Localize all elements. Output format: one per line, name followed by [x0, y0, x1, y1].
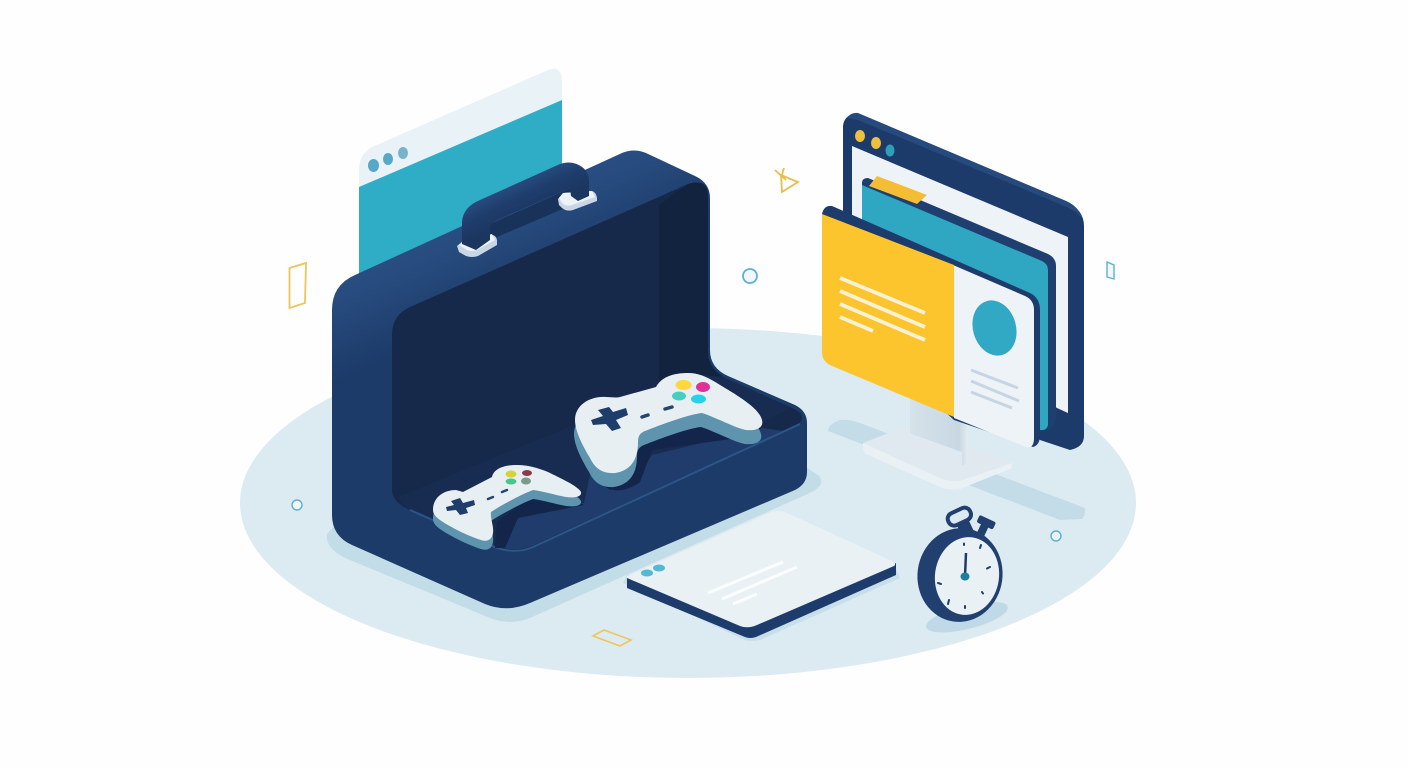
handle [457, 163, 597, 257]
stopwatch loop [946, 506, 978, 538]
stand base [863, 425, 1012, 490]
large game controller [574, 373, 762, 490]
handle foot left [457, 235, 497, 257]
decorative outlines [290, 168, 1114, 646]
inner wall right shade [659, 182, 722, 392]
monitor frame [843, 113, 1084, 450]
briefcase outer shell [332, 150, 807, 608]
handle recess [488, 188, 596, 240]
card white panel [953, 265, 1034, 447]
yellow rectangle left [290, 263, 306, 308]
small game controller [433, 465, 584, 550]
ground ellipse [240, 328, 1136, 678]
small controller shadow [495, 497, 584, 548]
controller shadow [592, 426, 752, 490]
stopwatch case [911, 523, 1009, 627]
controller select and start [642, 407, 672, 417]
stopwatch face [930, 533, 1004, 619]
stopwatch pivot [960, 572, 970, 580]
controller side [574, 387, 761, 487]
handle bar [462, 163, 589, 250]
briefcase shadow [327, 466, 821, 622]
card teal circle [966, 295, 1023, 361]
blue ring left [292, 500, 302, 510]
folder tab [869, 176, 927, 204]
small controller select and start [488, 490, 507, 499]
handle foot right [558, 191, 597, 211]
tablet text lines [708, 562, 797, 604]
tablet side [627, 563, 896, 638]
tablet top [627, 511, 895, 627]
window dots [368, 147, 408, 172]
stopwatch ticks [938, 544, 990, 608]
blue ring top [743, 269, 757, 283]
stopwatch shadow [923, 595, 1011, 639]
stand shadow [828, 420, 1085, 520]
controller d-pad [591, 407, 628, 431]
card grey lines [971, 370, 1019, 408]
monitor stand [828, 395, 1085, 520]
stopwatch hand [965, 553, 966, 576]
monitor screen [852, 146, 1068, 413]
yellow rectangle bottom [593, 630, 631, 646]
briefcase [327, 150, 821, 622]
stopwatch button [972, 515, 996, 539]
card yellow panel [822, 214, 954, 417]
tray rim [410, 424, 800, 551]
tablet dots [641, 564, 665, 576]
monitor frame highlight [847, 113, 1082, 218]
card text lines [840, 278, 925, 340]
front card [822, 206, 1040, 447]
stand neck [910, 395, 968, 470]
tray back shade [398, 375, 790, 549]
controller buttons [672, 380, 710, 404]
monitor window dots [855, 130, 894, 156]
small cyan rectangle right [1107, 262, 1114, 279]
small controller side [433, 474, 581, 550]
small controller top face [433, 465, 581, 541]
stopwatch [911, 506, 1011, 639]
small controller d-pad [446, 498, 475, 515]
yellow triangle [775, 168, 798, 192]
back browser window [359, 69, 562, 300]
tray floor [500, 428, 783, 549]
tablet [623, 511, 900, 641]
tablet shadow [623, 566, 900, 641]
teal folder [862, 176, 1056, 430]
card dark edge [822, 206, 1040, 447]
small controller buttons [506, 470, 532, 484]
briefcase inner wall [392, 182, 802, 551]
controller top face [575, 373, 762, 473]
blue ring right [1051, 531, 1061, 541]
